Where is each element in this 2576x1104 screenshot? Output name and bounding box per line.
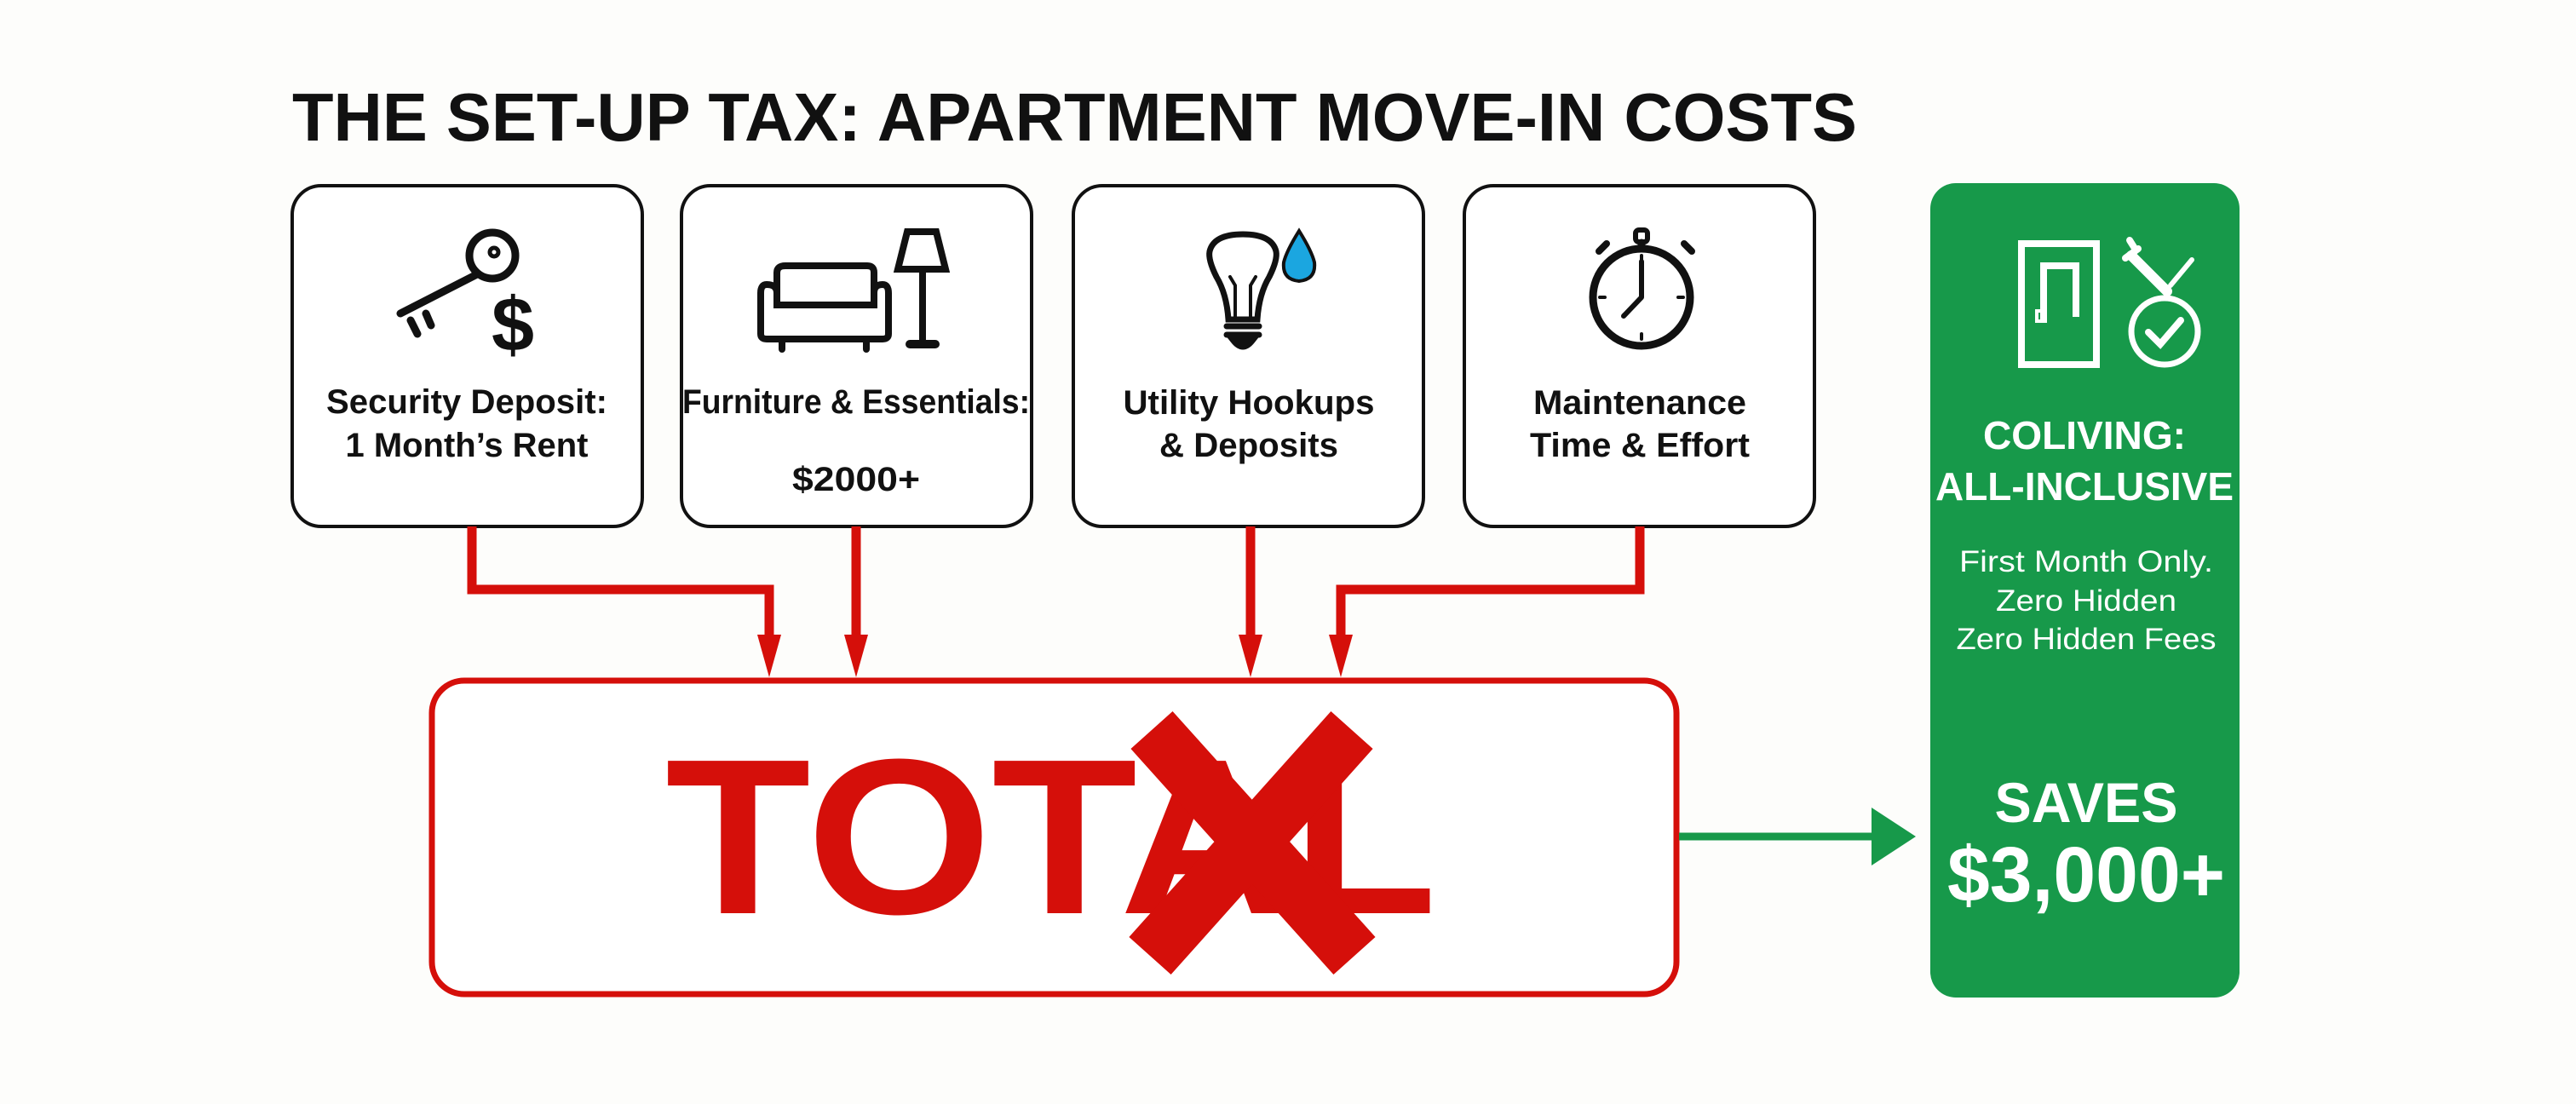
text: coliving heading: COLIVING:: [1983, 413, 2186, 457]
text: security deposit label: 1 Month’s Rent: [346, 427, 588, 464]
text: furniture label: $2000+: [792, 461, 920, 498]
icon: sofa and lamp: [761, 232, 946, 349]
text: utility label: [1123, 384, 1375, 464]
text: maintenance label: Maintenance: [1533, 384, 1746, 422]
text: utility label: & Deposits: [1159, 427, 1338, 464]
arrows: red cost arrows: [472, 526, 1640, 677]
panel: coliving: [1930, 183, 2240, 998]
icon: stopwatch: [1593, 230, 1692, 346]
panel: maintenance: [1464, 186, 1814, 526]
icon: door: [2021, 244, 2096, 365]
panel: total box: [432, 681, 1676, 994]
icon: cross-out X: [1150, 730, 1354, 956]
text: maintenance label: Time & Effort: [1530, 427, 1750, 464]
icon: key and dollar: [400, 233, 534, 368]
icon: key and dollar: $: [492, 283, 534, 368]
text: savings: $3,000+: [1947, 831, 2225, 918]
arrow: green savings arrow: [1679, 808, 1916, 865]
panel: utilities: [1073, 186, 1423, 526]
text: coliving details: Zero Hidden Fees: [1956, 623, 2217, 656]
text: coliving heading: ALL-INCLUSIVE: [1935, 464, 2234, 509]
icon: wrench and check: [2125, 240, 2198, 365]
text: maintenance label: [1530, 384, 1750, 464]
text: TOTAL: TOTAL: [665, 714, 1437, 961]
text: coliving details: Zero Hidden: [1996, 584, 2176, 618]
panel: security deposit: [292, 186, 642, 526]
title: THE SET-UP TAX: APARTMENT MOVE-IN COSTS: [292, 79, 1857, 155]
text: furniture label: [682, 383, 1030, 498]
text: coliving details: [1956, 545, 2217, 656]
text: coliving heading: [1935, 413, 2234, 509]
panel: furniture: [681, 186, 1032, 526]
text: security deposit label: Security Deposit:: [326, 383, 607, 421]
text: furniture label: Furniture & Essentials:: [682, 383, 1030, 421]
text: coliving details: First Month Only.: [1959, 545, 2213, 578]
text: utility label: Utility Hookups: [1123, 384, 1375, 422]
text: savings: [1947, 771, 2225, 918]
text: savings: SAVES: [1995, 771, 2177, 834]
icon: light bulb and water drop: [1210, 231, 1314, 347]
text: security deposit label: [326, 383, 607, 464]
